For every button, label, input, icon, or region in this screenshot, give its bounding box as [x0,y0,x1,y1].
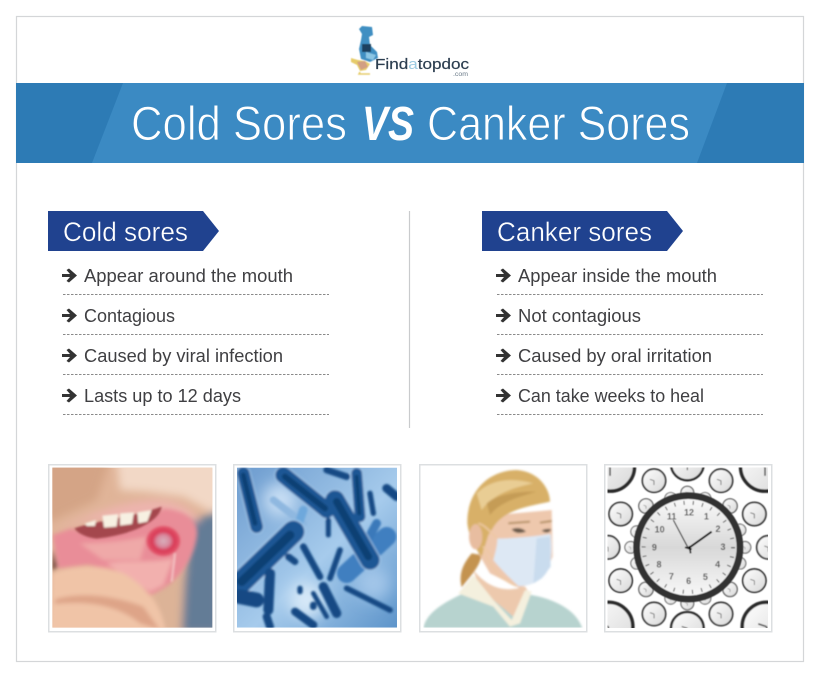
big clock: 10 [655,525,665,535]
title: Canker Sores [427,98,690,151]
panel: canker sores [482,211,763,414]
list item: contagious [62,306,329,334]
photo: mouth sore [40,460,220,633]
big clock: 7 [669,572,674,582]
logo wordmark: Find atopdoc [375,56,470,73]
big clock: 8 [656,560,661,570]
list item: appear around the mouth [62,266,329,294]
big clock: 12 [684,507,694,517]
heading: cold sores [48,211,219,251]
list item: not contagious: Not contagious [518,306,641,326]
big clock: 6 [686,576,691,586]
logo: Findatopdoc [351,26,470,78]
heading: cold sores: Cold sores [63,217,188,247]
heading: canker sores: Canker sores [497,217,652,247]
list item: can take weeks to heal: Can take weeks to heal [518,386,704,406]
panel: cold sores [48,211,329,414]
big clock: 1 [704,511,709,521]
list item: caused by oral irritation [496,346,763,374]
big clock: 3 [720,542,725,552]
list item: contagious: Contagious [84,306,175,326]
list item: caused by viral infection [62,346,329,374]
title banner [16,83,804,163]
photo: blue bacteria [234,465,401,632]
list item: caused by viral infection: Caused by viral infection [84,346,283,366]
big clock: 9 [652,542,657,552]
list item: can take weeks to heal [496,386,763,414]
list item: appear inside the mouth: Appear inside the mouth [518,266,717,286]
list item: lasts up to 12 days [62,386,329,414]
title: VS [362,98,414,151]
big clock: 5 [703,572,708,582]
big clock: 4 [715,559,720,569]
list item: appear inside the mouth [496,266,763,294]
list item: not contagious [496,306,763,334]
big clock [637,496,740,599]
photo: clocks pattern [604,464,772,632]
heading: canker sores [482,211,683,251]
list item: appear around the mouth: Appear around the mouth [84,266,293,286]
big clock: 2 [715,524,720,534]
list item: lasts up to 12 days: Lasts up to 12 days [84,386,241,406]
icon: bird mascot [351,26,378,74]
logo .com: .com [453,72,468,78]
title: Cold Sores [131,98,347,151]
small clocks [608,468,768,628]
photo: woman wearing surgical mask [420,465,587,632]
list item: caused by oral irritation: Caused by oral irritation [518,346,712,366]
big clock: 11 [667,511,676,521]
